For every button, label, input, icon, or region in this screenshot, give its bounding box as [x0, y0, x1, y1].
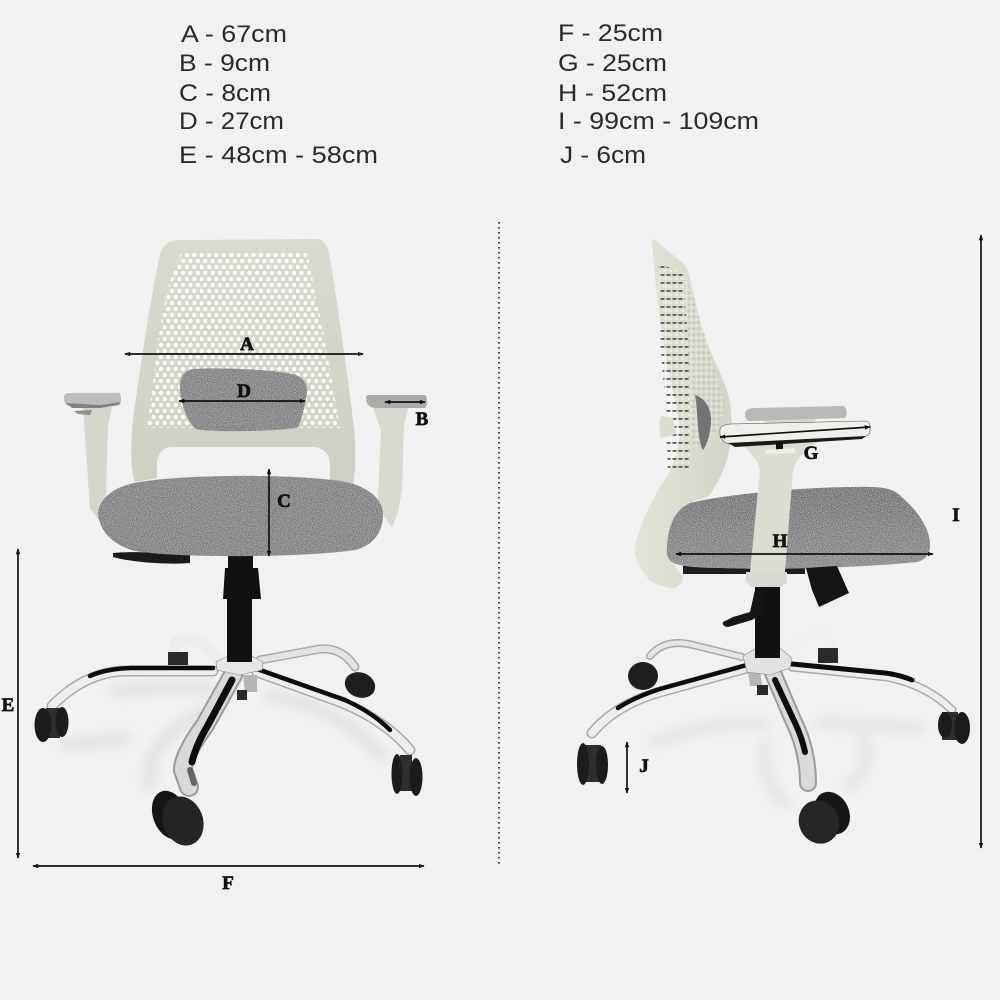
- tilt knob: [806, 566, 849, 607]
- gas lift column: [223, 553, 261, 662]
- seat cushion: [667, 487, 930, 569]
- dimension D: D: [237, 381, 251, 402]
- left caster: [34, 707, 68, 742]
- tilt lever: [113, 552, 190, 564]
- rear right caster: [818, 648, 838, 663]
- specification list: left column: C - 8cm: [179, 80, 271, 107]
- seat underside: [683, 566, 805, 574]
- upper armrest pad: [745, 406, 847, 424]
- seat cushion: [98, 476, 383, 556]
- side view chair: [577, 238, 970, 850]
- dimension G: [720, 427, 870, 464]
- height lever: [723, 590, 765, 627]
- specification list: right column: I - 99cm - 109cm: [558, 108, 759, 135]
- chrome base: [52, 639, 410, 787]
- gas lift column: [755, 587, 780, 659]
- specification list: right column: G - 25cm: [558, 50, 667, 77]
- backrest perforations: [145, 250, 342, 430]
- dimension B: [385, 402, 429, 430]
- left armrest: [64, 393, 121, 522]
- rear left caster: [168, 652, 188, 665]
- dimension J: J: [639, 756, 649, 777]
- armrest adjustment plate: [765, 442, 795, 454]
- specification list: left column: [179, 21, 378, 169]
- chrome base: [592, 632, 952, 783]
- backrest shell: [131, 239, 355, 486]
- base hub: [216, 656, 263, 675]
- dimension I: I: [952, 505, 960, 526]
- back adjustment knob: [660, 416, 676, 438]
- floor shadows: [650, 722, 925, 805]
- lift column front: [227, 620, 252, 662]
- lower armrest pad: [720, 421, 870, 447]
- front caster: [792, 786, 857, 850]
- dimension B: B: [416, 409, 429, 430]
- armrest post: [740, 438, 825, 572]
- right armrest: [366, 395, 427, 528]
- dimension C: C: [277, 491, 291, 512]
- backrest shell: [635, 238, 732, 588]
- right caster: [938, 712, 970, 744]
- rear left caster: [628, 662, 658, 690]
- front view chair: [34, 239, 427, 851]
- dimension E: E: [2, 695, 14, 716]
- dimension F: F: [222, 873, 234, 894]
- lumbar cushion: [695, 395, 711, 450]
- base hub: [743, 648, 792, 675]
- lumbar cushion: [180, 368, 307, 431]
- dimension D: [179, 381, 305, 402]
- dimension J: [627, 742, 649, 793]
- dimension C: [269, 469, 291, 556]
- floor shadows: [60, 688, 385, 790]
- dark backrest perforations: [658, 263, 690, 468]
- dimension H: H: [773, 531, 788, 552]
- specification list: left column: D - 27cm: [179, 108, 284, 135]
- lift column front: [755, 630, 780, 658]
- base collar: [748, 670, 768, 695]
- base collar: [237, 675, 257, 700]
- specification list: right column: J - 6cm: [560, 142, 646, 169]
- dimension A: A: [240, 334, 254, 355]
- post clamp: [746, 572, 787, 587]
- right caster: [392, 754, 422, 796]
- specification list: left column: A - 67cm: [181, 21, 287, 48]
- specification list: right column: H - 52cm: [558, 80, 667, 107]
- rear right caster: [341, 668, 379, 702]
- left caster: [577, 743, 608, 785]
- faint backrest perforations: [683, 274, 724, 449]
- front caster: [145, 786, 210, 851]
- specification list: left column: E - 48cm - 58cm: [179, 142, 378, 169]
- specification list: right column: [558, 20, 759, 169]
- dotted divider: [498, 222, 500, 866]
- specification list: left column: B - 9cm: [179, 50, 270, 77]
- dimension G: G: [804, 443, 819, 464]
- specification list: right column: F - 25cm: [558, 20, 663, 47]
